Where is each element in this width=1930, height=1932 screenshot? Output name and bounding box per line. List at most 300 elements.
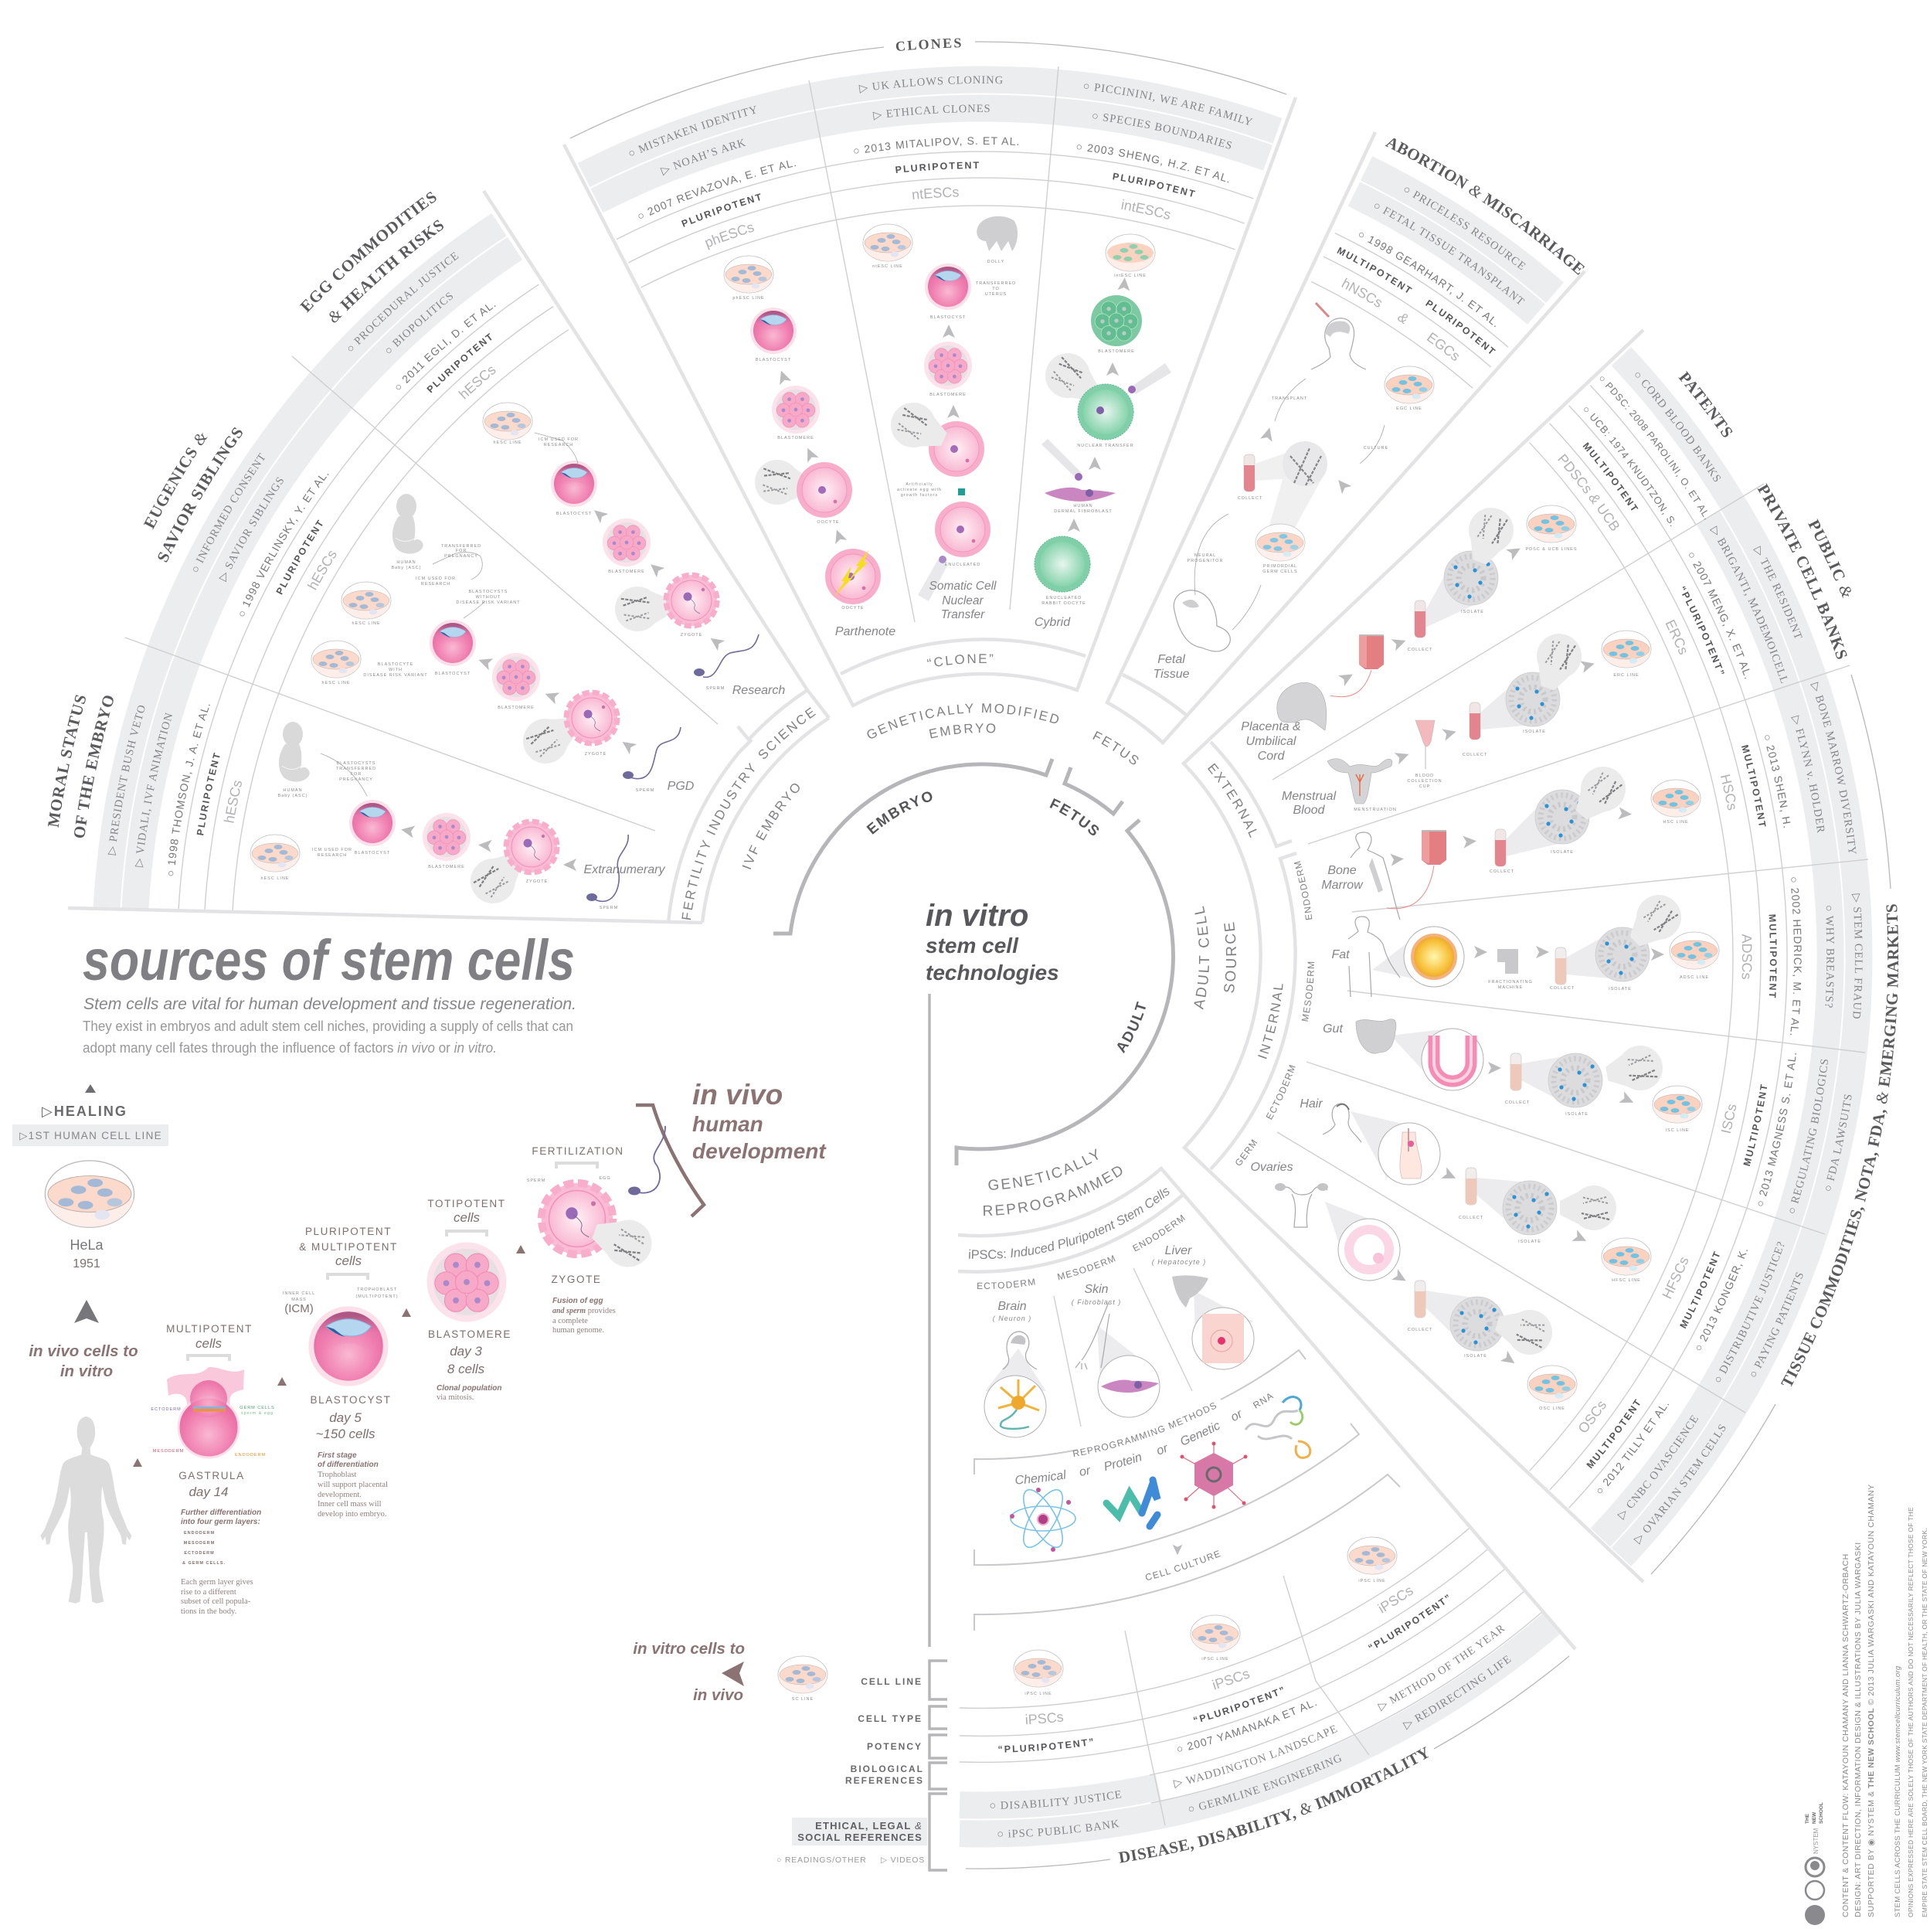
pgd row icons: TRANSFERRED <box>441 544 481 549</box>
ovaries row icons: OSC LINE <box>1539 1406 1565 1411</box>
extranumerary row icons: BLASTOCYSTS <box>337 761 375 766</box>
parthenote row icons <box>724 256 895 638</box>
somatic cell nuclear transfer row icons: DOLLY <box>987 260 1004 264</box>
legend ethical legal social references: SOCIAL REFERENCES <box>797 1832 923 1843</box>
ipsc source: liver <box>1152 1244 1254 1369</box>
column: parthenote references: ○ 2007 REVAZOVA, E. ET AL. <box>635 156 798 223</box>
blastocyst stage: ~150 cells <box>315 1427 375 1441</box>
column: bone marrow: MULTIPOTENT <box>1739 743 1768 829</box>
column: abortion and miscarriage: ○ PRICELESS RESOURCE <box>1401 183 1528 274</box>
gastrula stage: ENDODERM <box>184 1531 215 1536</box>
ring label adult cell: ADULT CELL <box>1194 906 1210 1009</box>
column: moral status of the embryo: hESCs <box>224 781 242 823</box>
research row icons: ICM USED FOR <box>539 437 579 442</box>
fertilization stage: EGG <box>599 1176 611 1181</box>
gut row icons <box>1323 1019 1702 1133</box>
pgd row icons: DISEASE RISK VARIANT <box>363 673 428 678</box>
fetal tissue row icons: NEURAL <box>1194 553 1216 558</box>
column: eugenics and savior siblings: SAVIOR SIBLINGS <box>158 427 243 563</box>
column: hair: HFSCs <box>1659 1254 1692 1301</box>
central arc: adult <box>957 820 1173 1165</box>
credits: DESIGN: ART DIRECTION, INFORMATION DESIGN & ILLUSTRATIONS BY JULIA WARGASKI <box>1854 1542 1863 1917</box>
research row icons: hESC LINE <box>493 440 522 445</box>
introduction text <box>83 995 576 1056</box>
logos <box>1805 1802 1825 1925</box>
fetal tissue row icons: EGC LINE <box>1396 406 1422 411</box>
legend row labels <box>845 1676 924 1786</box>
fetal tissue row icons: CULTURE <box>1364 446 1388 451</box>
column: bone marrow: ▷ BONE MARROW DIVERSITY <box>1809 682 1858 856</box>
menstrual blood row icons: COLLECT <box>1463 753 1487 757</box>
fertilization stage: and sperm provides <box>552 1307 616 1315</box>
blastocyst stage: First stage <box>318 1451 357 1460</box>
credits: STEM CELLS ACROSS THE CURRICULUM www.stemcellcurriculum.org <box>1894 1665 1902 1917</box>
column: egg commodities and health risks: ○ PROCEDURAL JUSTICE <box>348 252 459 351</box>
column: gut: ○ 2013 MAGNESS S. ET AL. <box>1753 1050 1799 1209</box>
in vivo human development heading: in vivo <box>692 1079 783 1111</box>
fetal tissue row icons: Fetal <box>1157 653 1185 666</box>
column: patents: PATENTS <box>1675 368 1738 441</box>
gastrula stage: ENDODERM <box>235 1453 266 1458</box>
legend row labels: POTENCY <box>867 1741 923 1752</box>
column: patents: ○ CORD BLOOD BANKS <box>1631 369 1724 485</box>
column: hair: MULTIPOTENT <box>1678 1249 1723 1330</box>
gastrula stage: subset of cell popula- <box>181 1597 251 1606</box>
ring label internal: INTERNAL <box>1258 984 1283 1059</box>
column: ipsc liver references <box>1367 1583 1514 1732</box>
column: eugenics and savior siblings: ▷ SAVIOR SIBLINGS <box>219 477 284 582</box>
column: ipsc brain references: “PLURIPOTENT” <box>997 1736 1096 1755</box>
hair row icons: ISOLATE <box>1518 1240 1541 1244</box>
ovaries row icons: COLLECT <box>1408 1328 1432 1332</box>
column: bone marrow: ○ 2013 SHEN, H. <box>1761 733 1794 830</box>
bone marrow row icons: COLLECT <box>1490 869 1514 874</box>
ipsc source: brain: ( Neuron ) <box>993 1315 1031 1322</box>
central label fetus: FETUS <box>1049 798 1099 835</box>
somatic cell nuclear transfer row icons: BLASTOCYST <box>930 315 966 320</box>
research row icons: RESEARCH <box>544 443 573 447</box>
ring label source: SOURCE <box>1224 922 1236 993</box>
somatic cell nuclear transfer row icons: ENUCLEATED <box>945 563 980 567</box>
column: fat <box>1739 876 1864 1038</box>
blastomere stage: Clonal population <box>437 1384 501 1393</box>
column: public and private cell banks: ▷ THE RESIDENT <box>1752 545 1805 642</box>
in vivo bracket <box>636 1105 704 1216</box>
column: ovaries: ○ 2012 TILLY ET AL. <box>1593 1397 1672 1497</box>
column: eugenics and savior siblings: ○ INFORMED CONSENT <box>193 453 265 572</box>
fertilization stage: a complete <box>552 1317 588 1325</box>
ipsc dish middle <box>1191 1615 1240 1662</box>
column: patents: ○ UCB: 1974 KNUDTZON, S. <box>1580 403 1680 529</box>
somatic cell nuclear transfer row icons: Nuclear <box>942 594 984 607</box>
pgd row icons: ICM USED FOR <box>416 577 456 581</box>
column: ipsc skin references: ▷ WADDINGTON LANDSCAPE <box>1173 1723 1340 1790</box>
blastocyst stage: BLASTOCYST <box>310 1394 392 1406</box>
gastrula stage: GASTRULA <box>178 1470 245 1481</box>
bone marrow row icons <box>1321 757 1701 920</box>
column: gut: ○ REGULATING BIOLOGICS <box>1786 1057 1831 1216</box>
hair row icons: HFSC LINE <box>1612 1278 1641 1283</box>
fat row icons: COLLECT <box>1550 986 1575 991</box>
column: fat: ▷ STEM CELL FRAUD <box>1850 893 1864 1020</box>
bone marrow row icons: HSC LINE <box>1663 820 1689 825</box>
column: ipsc liver references: iPSCs <box>1375 1583 1416 1617</box>
research row icons: ZYGOTE <box>681 633 702 638</box>
label: in vivo cells to in vitro: in vivo cells to <box>29 1342 138 1360</box>
blastocyst stage: development. <box>318 1491 362 1499</box>
menstrual blood row icons <box>1282 628 1651 817</box>
ring label clone: “CLONE” <box>927 654 994 666</box>
blastocyst stage: MASS <box>291 1298 307 1302</box>
gut row icons: ISC LINE <box>1666 1128 1689 1133</box>
fat row icons: ADSC LINE <box>1680 975 1709 980</box>
column: moral status of the embryo: ○ 1998 THOMSON, J. A. ET AL. <box>168 705 210 876</box>
parthenote row icons: phESC LINE <box>732 296 765 301</box>
credits: CONTENT & CONTENT FLOW: KATAYOUN CHAMANY AND LIANNA SCHWARTZ-ORBACH <box>1841 1553 1850 1917</box>
column: ipsc liver references: ▷ METHOD OF THE YEAR <box>1376 1622 1508 1713</box>
extranumerary row icons: HUMAN <box>283 788 303 793</box>
outer thin title arcs <box>570 42 1891 1869</box>
cybrid row icons: Cybrid <box>1035 616 1071 629</box>
ipsc source: skin: ( Fibroblast ) <box>1072 1298 1121 1306</box>
hair row icons: COLLECT <box>1459 1216 1483 1220</box>
small development arrows <box>133 1245 525 1467</box>
blastocyst stage: Inner cell mass will <box>318 1500 382 1509</box>
ring label science: SCIENCE <box>759 707 816 759</box>
column: moral status of the embryo: ▷ VIDALI, IVF ANIMATION <box>134 713 173 867</box>
ipsc source: brain <box>984 1300 1046 1437</box>
extranumerary row icons: Extranumerary <box>584 863 665 876</box>
healing reference and HeLa: 1951 <box>73 1257 100 1270</box>
healing reference and HeLa <box>12 1084 168 1270</box>
ring label fertility industry: FERTILITY INDUSTRY <box>681 762 754 920</box>
column: public and private cell banks: PUBLIC & <box>1804 517 1857 601</box>
column: nuclear transfer references <box>854 76 1018 199</box>
ring label ivf embryo: IVF EMBRYO <box>742 784 800 869</box>
pgd row icons: HUMAN <box>396 560 416 565</box>
column: eugenics and savior siblings <box>144 427 337 617</box>
gastrula stage: MULTIPOTENT <box>166 1323 253 1335</box>
cybrid row icons <box>1035 234 1171 629</box>
placenta row icons: Cord <box>1258 750 1285 763</box>
column: gut: MULTIPOTENT <box>1741 1082 1770 1168</box>
healing reference and HeLa: ▷1ST HUMAN CELL LINE <box>19 1130 162 1141</box>
fetal tissue row icons <box>1154 303 1434 681</box>
somatic cell nuclear transfer row icons: Transfer <box>941 608 985 621</box>
fertilization stage: ZYGOTE <box>551 1274 602 1285</box>
blastocyst stage: day 5 <box>329 1410 362 1425</box>
germ layer labels <box>977 1212 1188 1291</box>
column: public and private cell banks: ERCs <box>1662 617 1691 657</box>
pgd row icons: RESEARCH <box>421 582 450 587</box>
label: in vivo cells to in vitro: in vitro <box>60 1362 113 1380</box>
column: fat: ADSCs <box>1739 934 1755 980</box>
title: tissue commodities: TISSUE COMMODITIES, NOTA, FDA, & EMERGING MARKETS <box>1777 903 1902 1390</box>
column: nuclear transfer references: ntESCs <box>911 184 960 202</box>
menstrual blood row icons: ERC LINE <box>1613 673 1639 678</box>
fat row icons: MACHINE <box>1498 985 1523 990</box>
column: ovaries: OSCs <box>1575 1397 1609 1436</box>
legend row labels: BIOLOGICAL <box>851 1764 924 1774</box>
healing reference and HeLa: HeLa <box>70 1237 104 1253</box>
menstrual blood row icons: CUP <box>1419 784 1430 789</box>
column: egg commodities and health risks: & HEALTH RISKS <box>329 219 443 323</box>
pgd row icons: ZYGOTE <box>585 752 607 757</box>
blastomere stage: day 3 <box>450 1344 482 1359</box>
extranumerary row icons: RESEARCH <box>318 853 347 858</box>
somatic cell nuclear transfer row icons: ntESC LINE <box>872 264 903 269</box>
extranumerary row icons: ZYGOTE <box>526 879 548 884</box>
column: parthenote references: PLURIPOTENT <box>680 191 764 230</box>
pgd row icons <box>311 494 695 793</box>
somatic cell nuclear transfer row icons: TRANSFERRED <box>976 281 1016 286</box>
central arc: fetus <box>1065 767 1123 814</box>
legend row labels: CELL TYPE <box>858 1713 923 1724</box>
research row icons: Research <box>732 684 785 697</box>
gastrula stage: tions in the body. <box>181 1607 236 1616</box>
column: ipsc brain references: ○ iPSC PUBLIC BANK <box>997 1818 1120 1841</box>
menstrual blood row icons: ISOLATE <box>1523 730 1546 734</box>
extranumerary row icons: FOR <box>351 772 362 777</box>
pgd row icons: DISEASE RISK VARIANT <box>456 600 521 605</box>
reprogramming methods frame and labels: REPROGRAMMING METHODS <box>1072 1400 1219 1459</box>
menstrual blood row icons: Menstrual <box>1282 790 1337 803</box>
pgd row icons: WITHOUT <box>476 595 501 600</box>
column: moral status of the embryo: PLURIPOTENT <box>196 753 219 835</box>
column: bone marrow: ▷ FLYNN v. HOLDER <box>1789 715 1827 835</box>
blastocyst stage <box>283 1226 399 1519</box>
pgd row icons: BLASTOMERE <box>498 706 535 710</box>
column: nuclear transfer references: PLURIPOTENT <box>895 160 980 175</box>
gut row icons: Gut <box>1323 1022 1343 1036</box>
column: ipsc skin references: “PLURIPOTENT” <box>1192 1684 1288 1726</box>
column: hair: ○ PAYING PATIENTS <box>1747 1270 1807 1380</box>
column: eugenics and savior siblings: hESCs <box>308 551 337 590</box>
ipsc source: brain: Brain <box>997 1300 1027 1313</box>
gastrula stage <box>151 1323 275 1616</box>
fat row icons: FRACTIONATING <box>1488 980 1533 985</box>
pgd row icons: BLASTOCYTE <box>378 662 413 667</box>
menstrual blood row icons: COLLECTION <box>1407 779 1442 784</box>
extranumerary row icons <box>250 722 665 913</box>
gastrula stage: cells <box>195 1336 223 1351</box>
in vitro cells to in vivo label <box>633 1640 745 1704</box>
thin ring lines across all wedges <box>178 151 1787 1803</box>
main title: sources of stem cells <box>83 928 575 992</box>
central label adult: ADULT <box>1117 1002 1146 1053</box>
column: ipsc skin references <box>1173 1665 1344 1816</box>
cybrid row icons: BLASTOMERE <box>1098 349 1135 354</box>
blastocyst stage: (MULTIPOTENT) <box>355 1294 399 1299</box>
column: gut: ISCs <box>1718 1103 1740 1135</box>
column: moral status of the embryo: OF THE EMBRYO <box>74 696 114 838</box>
column: cybrid references: PLURIPOTENT <box>1112 171 1198 200</box>
legend row labels: CELL LINE <box>861 1676 923 1687</box>
germ layer labels: ECTODERM <box>977 1276 1037 1291</box>
parthenote row icons: Parthenote <box>835 625 895 638</box>
title: clones: CLONES <box>896 39 961 51</box>
ipsc dish right <box>1347 1537 1397 1583</box>
column: ipsc skin references: ○ GERMLINE ENGINEERING <box>1187 1752 1344 1816</box>
gastrula stage: MESODERM <box>153 1449 184 1454</box>
heading: in vitro stem cell technologies <box>926 899 1059 985</box>
column: gut <box>1718 1050 1855 1216</box>
label: in vivo cells to in vitro <box>29 1342 138 1380</box>
column: parthenote references <box>629 105 796 250</box>
blastocyst stage: (ICM) <box>284 1302 314 1315</box>
column: ipsc liver references: “PLURIPOTENT” <box>1367 1591 1454 1653</box>
hair row icons <box>1300 1097 1651 1283</box>
pgd row icons: PGD <box>668 780 695 793</box>
cybrid row icons: DERMAL FIBROBLAST <box>1054 509 1113 514</box>
placenta row icons <box>1241 502 1578 763</box>
column: abortion and miscarriage: ○ FETAL TISSUE TRANSPLANT <box>1371 199 1527 308</box>
reprogramming methods frame and labels: Protein <box>1103 1451 1143 1474</box>
somatic cell nuclear transfer row icons: UTERUS <box>985 292 1007 297</box>
ipsc source: liver: Liver <box>1165 1244 1192 1257</box>
column: abortion and miscarriage: EGCs <box>1424 329 1463 364</box>
ring label ectoderm: ECTODERM <box>1266 1065 1296 1120</box>
in vitro cells to in vivo label: in vitro cells to <box>633 1640 745 1658</box>
credits: OPINIONS EXPRESSED HERE ARE SOLELY THOSE OF THE AUTHORS AND DO NOT NECESSARILY REFLECT THOSE OF THE <box>1907 1507 1915 1917</box>
logos: NYSTEM <box>1813 1828 1820 1854</box>
parthenote row icons: OOCYTE <box>817 520 840 525</box>
reprogramming methods frame and labels: Chemical <box>1014 1468 1067 1488</box>
fertilization stage: FERTILIZATION <box>532 1145 624 1157</box>
menstrual blood row icons: BLOOD <box>1415 774 1434 778</box>
credits <box>1841 1484 1928 1917</box>
pgd row icons: FOR <box>456 549 467 553</box>
cybrid row icons: intESC LINE <box>1114 274 1147 278</box>
introduction text: adopt many cell fates through the influence of factors in vivo or in vitro. <box>83 1040 497 1056</box>
ring label endoderm: ENDODERM <box>1294 861 1312 920</box>
extranumerary row icons: SPERM <box>600 906 618 910</box>
column: egg commodities and health risks: PLURIPOTENT <box>426 333 491 393</box>
blastomere stage: via mitosis. <box>437 1393 474 1402</box>
column: abortion and miscarriage <box>1337 138 1585 361</box>
blastocyst stage: will support placental <box>318 1481 388 1489</box>
fat row icons <box>1331 886 1719 997</box>
column: fat: ○ WHY BREASTS? <box>1822 904 1836 1009</box>
legend row labels: REFERENCES <box>845 1775 924 1786</box>
stem cell line dish <box>778 1656 827 1702</box>
cybrid row icons: ENUCLEATED <box>1046 596 1082 600</box>
ovaries row icons: Ovaries <box>1250 1161 1293 1174</box>
blastomere stage: TOTIPOTENT <box>427 1198 506 1209</box>
column: nuclear transfer references: ▷ UK ALLOWS CLONING <box>858 74 1004 95</box>
gastrula stage: rise to a different <box>181 1588 236 1597</box>
credits: SUPPORTED BY ◉ NYSTEM & THE NEW SCHOOL © 2013 JULIA WARGASKI AND KATAYOUN CHAMANY <box>1867 1484 1876 1917</box>
logos: NEW <box>1812 1811 1817 1824</box>
column: eugenics and savior siblings: EUGENICS & <box>144 433 207 530</box>
column: cybrid references <box>1077 83 1253 219</box>
column: egg commodities and health risks: ○ 2011 EGLI, D. ET AL. <box>396 304 496 389</box>
thick wedge borders and inner ring brackets <box>68 97 1643 1649</box>
column: nuclear transfer references: ○ 2013 MITALIPOV, S. ET AL. <box>852 134 1021 157</box>
bone marrow row icons: Bone <box>1327 864 1357 877</box>
cybrid row icons: RABBIT OOCYTE <box>1041 601 1086 606</box>
ipsc source: liver: ( Hepatocyte ) <box>1152 1258 1206 1266</box>
column: abortion and miscarriage: PLURIPOTENT <box>1424 298 1498 358</box>
pgd row icons: BLASTOCYSTS <box>469 590 508 594</box>
reprogramming icon: chemical atom <box>1010 1485 1075 1553</box>
fetal tissue row icons: PROGENITOR <box>1188 559 1223 563</box>
column: abortion and miscarriage: ABORTION & MISCARRIAGE <box>1383 132 1589 279</box>
in vivo human development heading: human <box>692 1112 763 1136</box>
column: eugenics and savior siblings: ○ 1998 VERLINSKY, Y. ET AL. <box>240 474 329 617</box>
blastomere stage <box>427 1198 511 1402</box>
human silhouette <box>40 1417 131 1604</box>
column: fat: MULTIPOTENT <box>1767 914 1779 999</box>
reprogramming methods frame and labels: RNA <box>1251 1389 1276 1411</box>
column: abortion and miscarriage: MULTIPOTENT <box>1335 245 1415 297</box>
column: public and private cell banks <box>1666 483 1851 683</box>
blastocyst stage: TROPHOBLAST <box>357 1287 397 1292</box>
column: moral status of the embryo: MORAL STATUS <box>48 695 86 828</box>
gastrula stage: Further differentiation <box>181 1509 261 1517</box>
reprogramming methods frame and labels: CELL CULTURE <box>1144 1548 1223 1583</box>
extranumerary row icons: BLASTOMERE <box>428 865 465 869</box>
ipsc dish right: iPSC LINE <box>1358 1579 1386 1583</box>
placenta row icons: Placenta & <box>1241 720 1301 733</box>
column: ovaries <box>1575 1396 1730 1546</box>
reprogramming methods frame and labels <box>974 1350 1400 1631</box>
column: moral status of the embryo <box>48 695 242 876</box>
column: ipsc brain references: ○ DISABILITY JUSTICE <box>989 1788 1123 1812</box>
gastrula stage: into four germ layers: <box>181 1518 260 1526</box>
column: public and private cell banks: ○ 2007 MENG, X. ET AL. <box>1685 549 1755 682</box>
fertilization stage <box>527 1126 665 1335</box>
column: bone marrow: HSCs <box>1718 773 1740 811</box>
in vitro cells to in vivo label: in vivo <box>693 1686 743 1704</box>
blastomere stage: BLASTOMERE <box>428 1328 511 1340</box>
fertilization stage: human genome. <box>552 1326 604 1335</box>
extranumerary row icons: Baby (ASC) <box>277 794 308 798</box>
pgd row icons: BLASTOCYST <box>435 672 471 676</box>
column: parthenote references: ○ MISTAKEN IDENTITY <box>627 104 759 161</box>
ipsc dish left: iPSC LINE <box>1024 1692 1052 1696</box>
gastrula stage: ECTODERM <box>184 1551 215 1556</box>
gastrula stage: Each germ layer gives <box>181 1578 253 1587</box>
column: gut: ○ FDA LAWSUITS <box>1822 1093 1855 1193</box>
column: patents <box>1558 371 1732 530</box>
pgd row icons: hESC LINE <box>352 621 381 626</box>
fetal tissue row icons: PRIMORDIAL <box>1263 564 1297 569</box>
fertilization stage: SPERM <box>527 1179 545 1183</box>
menstrual blood row icons: MENSTRUATION <box>1354 808 1397 812</box>
cybrid row icons: HUMAN <box>1073 504 1093 509</box>
column: ipsc skin references: iPSCs <box>1210 1665 1252 1693</box>
blastocyst stage: develop into embryo. <box>318 1510 387 1519</box>
column: cybrid references: ○ SPECIES BOUNDARIES <box>1091 110 1234 153</box>
column: ovaries: ▷ CNBC OVASCIENCE <box>1616 1413 1702 1522</box>
pgd row icons: SPERM <box>636 788 654 793</box>
pgd row icons: Baby (ASC) <box>391 566 422 570</box>
column: ipsc brain references: iPSCs <box>1024 1709 1064 1727</box>
reprogramming icon: protein helix <box>1106 1480 1157 1526</box>
column: nuclear transfer references: ▷ ETHICAL CLONES <box>872 103 991 122</box>
ring label mesoderm: MESODERM <box>1301 961 1314 1022</box>
somatic cell nuclear transfer row icons <box>863 216 1018 621</box>
blastocyst stage: & MULTIPOTENT <box>299 1241 398 1253</box>
gastrula stage: GERM CELLS <box>240 1406 275 1410</box>
cybrid row icons: NUCLEAR TRANSFER <box>1077 444 1134 448</box>
blastocyst stage: cells <box>335 1253 362 1268</box>
parthenote row icons: OOCYTE <box>841 606 865 611</box>
somatic cell nuclear transfer row icons: growth factors <box>901 493 938 498</box>
research row icons: BLASTOMERE <box>608 570 645 574</box>
pgd row icons: PREGNANCY <box>444 554 478 559</box>
